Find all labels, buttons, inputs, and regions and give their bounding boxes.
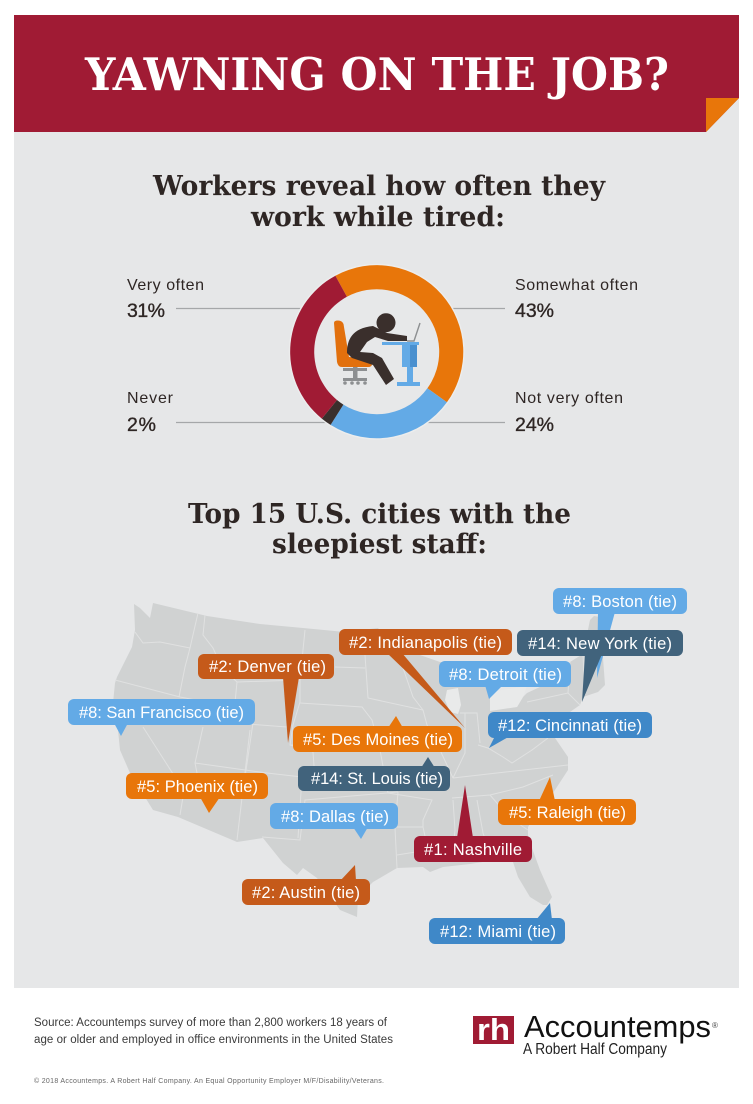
callout: Austin bbox=[242, 865, 370, 905]
callout: Boston: #8: Boston (tie) bbox=[563, 593, 677, 611]
callout: Cincinnati bbox=[488, 712, 652, 748]
callout: St. Louis bbox=[298, 757, 450, 791]
callout: Indianapolis: #2: Indianapolis (tie) bbox=[349, 634, 502, 652]
heading: work while tired: work while tired: bbox=[250, 201, 505, 233]
label: not very often bbox=[515, 390, 623, 436]
source note: Source: Accountemps survey of more than 2,800 workers 18 years of bbox=[34, 1017, 388, 1029]
callout: Boston bbox=[553, 588, 687, 678]
source note: age or older and employed in office environments in the United States bbox=[34, 1034, 393, 1046]
heading: work while tired: Workers reveal how often they bbox=[152, 170, 606, 202]
callout: Denver bbox=[198, 654, 334, 743]
callout: Miami bbox=[429, 903, 565, 944]
label: never: 2% bbox=[127, 414, 156, 436]
callout: Detroit bbox=[439, 661, 571, 699]
title: YAWNING ON THE JOB? bbox=[84, 48, 669, 101]
label: never bbox=[127, 390, 174, 436]
label: very often: 31% bbox=[127, 300, 165, 322]
heading: sleepiest cities bbox=[188, 498, 571, 560]
icon: orange page fold bbox=[706, 98, 739, 132]
callouts bbox=[68, 588, 687, 944]
callout: Nashville bbox=[414, 785, 532, 862]
copyright: © 2018 Accountemps. A Robert Half Company. An Equal Opportunity Employer M/F/Disability/Veterans. bbox=[34, 1077, 384, 1085]
label: never: Never bbox=[127, 390, 174, 407]
donut chart section bbox=[127, 264, 638, 440]
callout: Cincinnati: #12: Cincinnati (tie) bbox=[498, 717, 642, 735]
callout: Raleigh bbox=[498, 777, 636, 825]
label: somewhat often: Somewhat often bbox=[515, 277, 638, 294]
heading: work while tired bbox=[152, 170, 606, 233]
title banner bbox=[14, 15, 739, 132]
callout: Nashville: #1: Nashville bbox=[424, 841, 522, 859]
callout: New York: #14: New York (tie) bbox=[528, 635, 672, 653]
logo: Accountemps: A Robert Half Company bbox=[523, 1041, 667, 1058]
map of the United States bbox=[113, 603, 605, 917]
label: somewhat often bbox=[515, 277, 638, 322]
source note bbox=[34, 1017, 393, 1046]
callout: Indianapolis bbox=[339, 629, 512, 728]
logo: Accountemps: rh bbox=[477, 1012, 510, 1047]
callout: Miami: #12: Miami (tie) bbox=[440, 923, 556, 941]
callout: Phoenix bbox=[126, 773, 268, 813]
callout: San Francisco bbox=[68, 699, 255, 736]
callout: Des Moines bbox=[293, 716, 462, 752]
callout: Phoenix: #5: Phoenix (tie) bbox=[137, 778, 258, 796]
label: very often: Very often bbox=[127, 277, 204, 294]
label: not very often: Not very often bbox=[515, 390, 623, 407]
heading: sleepiest cities: sleepiest staff: bbox=[272, 528, 487, 560]
callout: Austin: #2: Austin (tie) bbox=[252, 884, 360, 902]
callout: Detroit: #8: Detroit (tie) bbox=[449, 666, 562, 684]
label: somewhat often: 43% bbox=[515, 300, 554, 322]
icon: tired worker at desk bbox=[334, 313, 420, 386]
callout: Dallas bbox=[270, 803, 398, 839]
callout: Raleigh: #5: Raleigh (tie) bbox=[509, 804, 626, 822]
callout: Dallas: #8: Dallas (tie) bbox=[281, 808, 389, 826]
logo: Accountemps bbox=[473, 1009, 718, 1058]
callout: San Francisco: #8: San Francisco (tie) bbox=[79, 704, 244, 722]
callout: Des Moines: #5: Des Moines (tie) bbox=[303, 731, 453, 749]
label: very often bbox=[127, 277, 204, 322]
label: not very often: 24% bbox=[515, 414, 554, 436]
callout: Denver: #2: Denver (tie) bbox=[209, 658, 326, 676]
logo: Accountemps: Accountemps bbox=[524, 1009, 711, 1044]
donut chart bbox=[289, 264, 465, 440]
logo: Accountemps: ® bbox=[712, 1021, 718, 1030]
callout: New York bbox=[517, 630, 683, 702]
callout: St. Louis: #14: St. Louis (tie) bbox=[311, 770, 443, 788]
heading: sleepiest cities: Top 15 U.S. cities with the bbox=[188, 498, 571, 530]
